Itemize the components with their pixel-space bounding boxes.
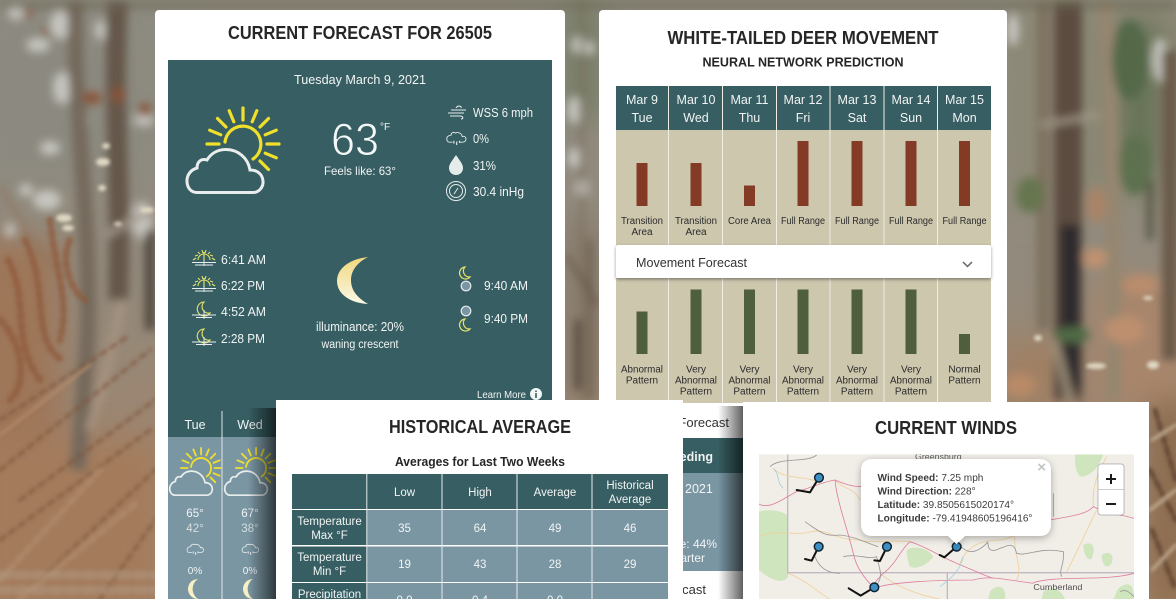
map popup: × bbox=[1037, 459, 1046, 476]
map popup: Longitude: -79.41948605196416° bbox=[878, 514, 1032, 524]
column dividers bbox=[668, 86, 938, 403]
table: averages: Temperature bbox=[297, 552, 362, 564]
icon: humidity drop bbox=[449, 155, 463, 175]
day: Tue bbox=[170, 418, 221, 599]
panel: historical average bbox=[276, 400, 683, 599]
day: Tue: 65° bbox=[186, 508, 204, 520]
date header row: Wed bbox=[683, 111, 709, 125]
table: averages: Historical bbox=[606, 480, 654, 492]
panel: white-tailed deer movement bbox=[599, 10, 1007, 599]
partly hidden breeding forecast: Breeding Forecast bbox=[623, 415, 729, 430]
partly hidden breeding forecast bbox=[683, 418, 743, 594]
current temperature: °F bbox=[380, 122, 390, 133]
map popup: Wind Speed: 7.25 mph bbox=[878, 473, 983, 484]
moonrise time: 4:52 AM bbox=[221, 305, 266, 319]
moon phase text bbox=[316, 320, 404, 351]
icon: crescent moon bbox=[337, 257, 368, 304]
date header row: Fri bbox=[796, 111, 810, 125]
bar chart: movement pattern: Very bbox=[847, 364, 867, 376]
table: averages: Average bbox=[609, 494, 651, 506]
learn more link: Learn More bbox=[477, 389, 526, 401]
bar chart: movement pattern: Pattern bbox=[733, 386, 766, 398]
pressure value: 30.4 inHg bbox=[473, 185, 524, 199]
partly hidden breeding forecast: Breeding Forecast bbox=[600, 582, 706, 597]
shadow beside winds card bbox=[718, 406, 743, 599]
map pink roads bbox=[759, 480, 1134, 588]
bar chart: movement pattern: Abnormal bbox=[890, 376, 932, 386]
bar chart: movement pattern: Pattern bbox=[626, 376, 658, 386]
day: Tue: 42° bbox=[186, 523, 204, 535]
background dry foliage bbox=[0, 220, 1176, 599]
table: averages: Temperature bbox=[297, 516, 362, 528]
table: averages: Average bbox=[534, 487, 576, 499]
icon: moon over bbox=[460, 267, 471, 291]
table: averages: 46 bbox=[624, 523, 636, 535]
wind map bbox=[759, 452, 1134, 599]
map labels: Greensburg bbox=[915, 452, 962, 461]
current temperature bbox=[324, 114, 396, 178]
date header row: Mar 15 bbox=[945, 93, 984, 107]
bar chart: movement pattern: Abnormal bbox=[621, 364, 663, 376]
dropdown: movement forecast bbox=[616, 245, 991, 278]
sunrise time: 6:41 AM bbox=[221, 253, 266, 267]
conditions list bbox=[446, 106, 533, 200]
table caption: Averages for Last Two Weeks bbox=[395, 454, 565, 469]
table: averages: 35 bbox=[398, 523, 411, 535]
current temperature: Feels like: 63° bbox=[324, 164, 396, 178]
bar chart: movement range: Area bbox=[631, 227, 653, 238]
rain chance value: 0% bbox=[473, 132, 489, 146]
date header row: Mar 10 bbox=[677, 93, 715, 107]
date header row: Sun bbox=[900, 111, 922, 125]
wind value: WSS 6 mph bbox=[473, 106, 533, 120]
bar chart: movement pattern: Abnormal bbox=[675, 376, 717, 386]
date header row: Mar 11 bbox=[731, 93, 769, 107]
table: averages: Max °F bbox=[311, 530, 348, 542]
day: Wed bbox=[225, 418, 276, 599]
date header row: Thu bbox=[739, 111, 760, 125]
date header row: Mar 13 bbox=[838, 93, 876, 107]
map popup bbox=[861, 459, 1051, 544]
day: Tue: Tue bbox=[184, 418, 206, 432]
sunset time: 6:22 PM bbox=[221, 279, 265, 293]
bar chart: movement pattern: Pattern bbox=[895, 386, 927, 398]
forecast date: Tuesday March 9, 2021 bbox=[294, 72, 426, 87]
icon: sunset bbox=[192, 276, 216, 292]
table: averages: Min °F bbox=[313, 566, 346, 578]
day: Wed: Wed bbox=[237, 418, 263, 432]
bar chart: movement range: Transition bbox=[675, 216, 717, 227]
shadow beside historical card bbox=[248, 408, 276, 599]
icon: partly sunny bbox=[187, 108, 279, 192]
dropdown: movement forecast: Movement Forecast bbox=[636, 255, 747, 270]
map water lines bbox=[773, 468, 963, 587]
day: Wed: 0% bbox=[243, 566, 257, 577]
humidity value: 31% bbox=[473, 159, 496, 173]
map parks and forests bbox=[759, 454, 1134, 599]
bar chart: movement pattern: Pattern bbox=[787, 386, 819, 398]
heading: current winds: CURRENT WINDS bbox=[875, 418, 1017, 438]
map grey boundaries bbox=[770, 455, 1134, 597]
table: averages: 29 bbox=[624, 559, 636, 571]
heading: current forecast: CURRENT FORECAST FOR 26505 bbox=[228, 23, 492, 43]
moonset time: 2:28 PM bbox=[221, 332, 265, 346]
moon phase text: illuminance: 20% bbox=[316, 320, 404, 334]
daily forecast columns bbox=[168, 411, 276, 599]
icon: pressure gauge bbox=[446, 182, 466, 200]
bar chart: movement range bbox=[621, 141, 987, 238]
table: averages: High bbox=[468, 487, 492, 499]
table: averages: 43 bbox=[474, 559, 486, 571]
date header row: Mar 9 bbox=[626, 93, 658, 107]
icon: wind bbox=[448, 106, 466, 119]
table: averages: 49 bbox=[549, 523, 561, 535]
icon: moon under bbox=[460, 306, 471, 331]
table: averages: 28 bbox=[549, 559, 561, 571]
map popup: Latitude: 39.8505615020174° bbox=[878, 500, 1014, 511]
bar chart: movement range: Full Range bbox=[889, 216, 933, 227]
table: averages: Low bbox=[394, 487, 416, 499]
panel: current forecast bbox=[155, 10, 565, 599]
partly hidden breeding forecast: 2021 bbox=[685, 482, 713, 496]
subheading: neural network prediction: NEURAL NETWORK PREDICTION bbox=[702, 54, 904, 70]
bar chart: movement pattern bbox=[621, 290, 981, 398]
sun and moon times bbox=[192, 250, 266, 346]
moon under time: 9:40 PM bbox=[484, 312, 528, 326]
day: Wed: 67° bbox=[241, 508, 259, 520]
bar chart: movement pattern: Abnormal bbox=[836, 376, 878, 386]
bar chart: movement pattern: Very bbox=[793, 364, 813, 376]
wind map: Cumberland bbox=[1033, 583, 1082, 592]
current temperature: 63 bbox=[331, 114, 379, 165]
bar chart: movement range: Core Area bbox=[728, 216, 771, 227]
bar chart: movement pattern: Abnormal bbox=[728, 376, 770, 386]
date header row: Mon bbox=[952, 111, 977, 125]
wind barb markers bbox=[797, 473, 961, 596]
bar chart: movement pattern: Pattern bbox=[680, 386, 712, 398]
moon phase text: waning crescent bbox=[321, 339, 399, 351]
bar chart: movement range: Full Range bbox=[781, 216, 825, 227]
moon overhead times bbox=[460, 267, 528, 331]
date header row: Mar 14 bbox=[892, 93, 930, 107]
day: Wed: 38° bbox=[241, 523, 259, 535]
bar chart: movement pattern: Normal bbox=[948, 364, 981, 376]
bar chart: movement pattern: Very bbox=[901, 364, 921, 376]
partly hidden breeding forecast: last quarter bbox=[645, 551, 705, 565]
date header row: Sat bbox=[848, 111, 867, 125]
map popup: Wind Direction: 228° bbox=[878, 486, 976, 498]
table: averages: 19 bbox=[398, 559, 411, 571]
panel: current winds bbox=[743, 402, 1149, 599]
date header row: Tue bbox=[631, 111, 653, 125]
map zoom controls bbox=[1098, 464, 1124, 515]
icon: moonset bbox=[192, 329, 216, 346]
weather panel background bbox=[168, 60, 552, 599]
tan chart backgrounds bbox=[616, 130, 991, 403]
bar chart: movement range: Transition bbox=[621, 216, 663, 227]
table: averages: 64 bbox=[474, 523, 487, 535]
partly hidden breeding forecast: Breeding bbox=[659, 450, 713, 464]
map boundaries bbox=[788, 454, 1134, 599]
bar chart: movement pattern: Very bbox=[686, 364, 706, 376]
bar chart: movement range: Full Range bbox=[942, 216, 987, 227]
bar chart: movement pattern: Pattern bbox=[841, 386, 873, 398]
moon over time: 9:40 AM bbox=[484, 279, 528, 293]
icon: sunrise bbox=[192, 250, 216, 266]
icon: rain cloud bbox=[447, 132, 466, 145]
partly hidden breeding forecast: illuminance: 44% bbox=[626, 537, 717, 551]
day: Tue: 0% bbox=[188, 566, 202, 577]
heading: historical average: HISTORICAL AVERAGE bbox=[389, 417, 571, 437]
bar chart: movement pattern: Pattern bbox=[948, 376, 981, 386]
heading: deer movement: WHITE-TAILED DEER MOVEMENT bbox=[668, 28, 939, 48]
map orange roads bbox=[759, 457, 1107, 599]
icon: moonrise bbox=[192, 302, 216, 319]
background light patches and trunks bbox=[0, 0, 1176, 470]
date header row bbox=[616, 86, 991, 130]
bar chart: movement pattern: Very bbox=[739, 364, 760, 376]
bar chart: movement range: Area bbox=[685, 227, 707, 238]
date header row: Mar 12 bbox=[784, 93, 822, 107]
bar chart: movement range: Full Range bbox=[835, 216, 879, 227]
bar chart: movement pattern: Abnormal bbox=[782, 376, 824, 386]
table: averages bbox=[292, 474, 668, 599]
